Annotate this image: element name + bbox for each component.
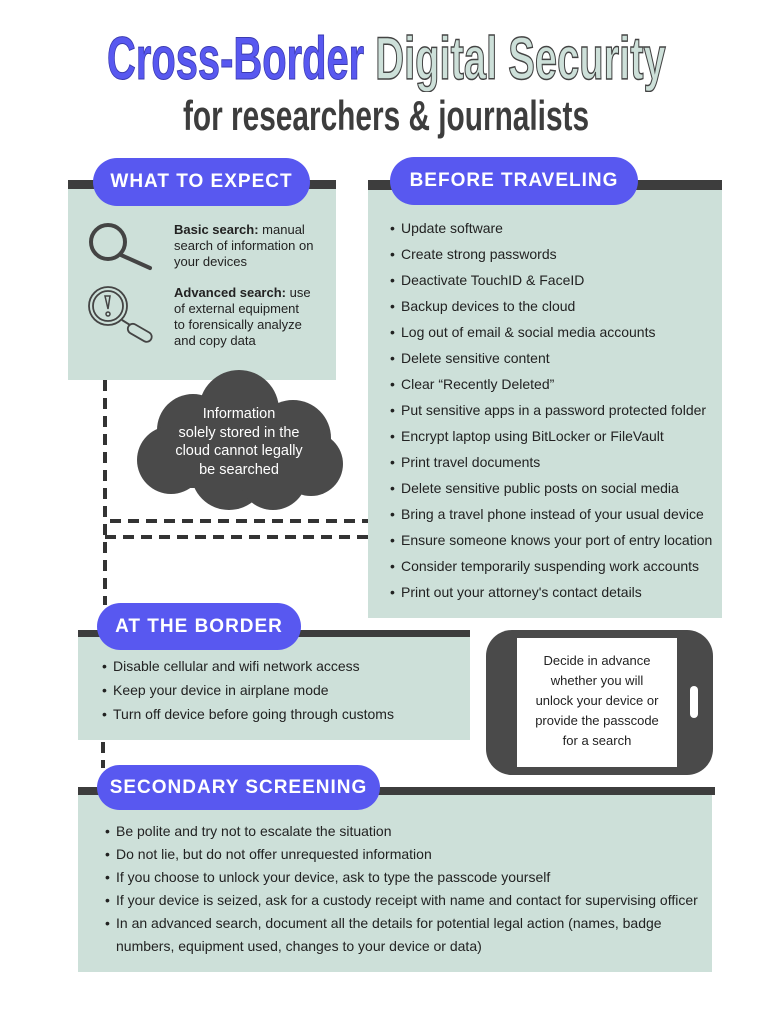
list: before traveling: Delete sensitive content xyxy=(401,350,550,366)
text: basic search xyxy=(174,222,313,269)
text: basic search: Basic search: manual xyxy=(174,222,305,237)
panel: what to expect xyxy=(68,158,336,380)
list: secondary screening: Do not lie, but do not offer unrequested information xyxy=(116,846,432,862)
title: Cross-Border Digital Security xyxy=(107,25,666,92)
list: secondary screening: In an advanced search, document all the details for potential legal action (names, badge xyxy=(116,915,662,931)
heading: secondary screening: SECONDARY SCREENING xyxy=(110,776,367,798)
cloud xyxy=(137,370,343,510)
list: before traveling: Clear “Recently Deleted” xyxy=(401,376,554,392)
list: before traveling: Consider temporarily suspending work accounts xyxy=(401,558,699,574)
icon: phone callout xyxy=(486,630,713,775)
list: before traveling: Log out of email & social media accounts xyxy=(401,324,655,340)
list: before traveling: Encrypt laptop using BitLocker or FileVault xyxy=(401,428,664,444)
phone text: whether you will xyxy=(551,673,643,688)
text: basic search: your devices xyxy=(174,254,247,269)
list: before traveling: Update software xyxy=(401,220,503,236)
icon: magnifier xyxy=(89,223,152,270)
panel: at the border xyxy=(78,603,470,740)
phone text: provide the passcode xyxy=(535,713,659,728)
panel: secondary screening xyxy=(78,765,715,972)
list: before traveling: Print travel documents xyxy=(401,454,540,470)
heading: secondary screening xyxy=(97,765,380,810)
heading: what to expect xyxy=(93,158,310,206)
list: at the border: Disable cellular and wifi network access xyxy=(113,658,360,674)
cloud text: solely stored in the xyxy=(179,424,299,440)
list: before traveling: Print out your attorney's contact details xyxy=(401,584,642,600)
text: advanced search: Advanced search: use xyxy=(174,285,311,300)
list: before traveling xyxy=(390,220,712,600)
heading: before traveling: BEFORE TRAVELING xyxy=(410,170,618,191)
list: before traveling: Create strong passwords xyxy=(401,246,557,262)
list: before traveling: Delete sensitive public posts on social media xyxy=(401,480,679,496)
phone text: for a search xyxy=(563,733,631,748)
heading: at the border xyxy=(97,603,301,650)
list: before traveling: Ensure someone knows your port of entry location xyxy=(401,532,712,548)
list: before traveling: Deactivate TouchID & FaceID xyxy=(401,272,584,288)
cloud text: Information xyxy=(203,406,275,422)
list: at the border xyxy=(102,658,394,722)
cloud text: cloud cannot legally xyxy=(175,443,303,459)
icon: advanced magnifier xyxy=(88,286,153,343)
text: advanced search: of external equipment xyxy=(174,301,299,316)
heading: what to expect: WHAT TO EXPECT xyxy=(110,171,293,192)
cloud text xyxy=(175,406,303,478)
heading: before traveling xyxy=(390,157,638,205)
list: secondary screening: numbers, equipment used, changes to your device or data) xyxy=(116,938,482,954)
cloud text: be searched xyxy=(199,462,279,478)
text: advanced search: and copy data xyxy=(174,333,256,348)
list: before traveling: Backup devices to the cloud xyxy=(401,298,575,314)
phone text: unlock your device or xyxy=(536,693,658,708)
phone text xyxy=(535,653,659,748)
list: secondary screening xyxy=(106,823,698,954)
list: secondary screening: If you choose to unlock your device, ask to type the passcode yourself xyxy=(116,869,550,885)
phone text: Decide in advance xyxy=(544,653,650,668)
list: at the border: Keep your device in airplane mode xyxy=(113,682,329,698)
text: advanced search xyxy=(174,285,311,348)
text: advanced search: to forensically analyze xyxy=(174,317,302,332)
list: at the border: Turn off device before going through customs xyxy=(113,706,394,722)
list: before traveling: Put sensitive apps in a password protected folder xyxy=(401,402,706,418)
subtitle: for researchers & journalists xyxy=(183,92,589,139)
text: basic search: search of information on xyxy=(174,238,313,253)
heading: at the border: AT THE BORDER xyxy=(115,616,283,636)
list: before traveling: Bring a travel phone instead of your usual device xyxy=(401,506,704,522)
panel: before traveling xyxy=(368,157,722,618)
list: secondary screening: Be polite and try not to escalate the situation xyxy=(116,823,392,839)
list: secondary screening: If your device is seized, ask for a custody receipt with name and contact for supervising officer xyxy=(116,892,698,908)
